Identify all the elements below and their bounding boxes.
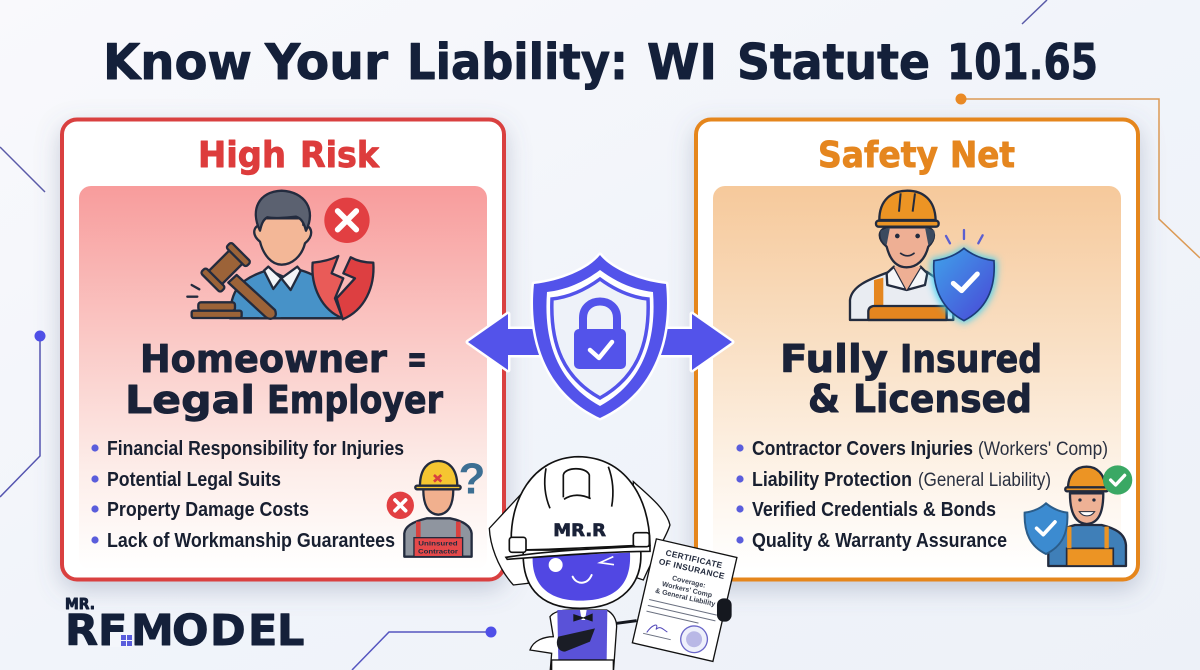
icon: uninsured contractor: Contractor [418, 548, 459, 555]
statement: homeowner equals legal employer: Homeowner [140, 337, 387, 381]
icon: uninsured contractor [387, 454, 485, 557]
heading: safety net: Net [950, 135, 1015, 176]
bullet list: protections: Liability Protection [752, 469, 912, 491]
certificate of insurance: Coverage: [671, 575, 706, 590]
certificate of insurance: CERTIFICATE [665, 547, 724, 570]
certificate of insurance [632, 539, 737, 661]
logo: Mr. Remodel: REMODEL [65, 606, 304, 656]
icon: happy contractor with shield and check [1025, 465, 1132, 566]
robot hand on certificate [717, 598, 732, 622]
bullet list: risks: Potential Legal Suits [107, 469, 281, 491]
panel: high risk [62, 120, 504, 580]
title: Know [103, 34, 252, 91]
bullet list: risks: Property Damage Costs [107, 499, 309, 521]
bullet list: protections [736, 438, 1108, 552]
certificate of insurance: Workers' Comp [661, 581, 713, 599]
robot head [523, 550, 641, 608]
title: Statute [737, 34, 930, 91]
heading: high risk [198, 135, 380, 176]
statement: homeowner equals legal employer [125, 337, 443, 422]
certificate of insurance: & General Liability [654, 588, 716, 608]
inner gradient: safety net [713, 186, 1121, 570]
icon: shield with padlock [533, 255, 667, 418]
robot visor face [533, 553, 630, 601]
icon: insured worker with glowing shield [850, 191, 997, 323]
statement: homeowner equals legal employer: Legal [125, 378, 255, 422]
logo: Mr. Remodel: MR. [65, 595, 95, 613]
arrow: double-headed [468, 314, 732, 370]
statement: fully insured and licensed [780, 337, 1042, 421]
mascot: Mr. R robot holding certificate [489, 457, 737, 670]
card frame: high risk [62, 120, 504, 580]
certificate of insurance: OF INSURANCE [658, 556, 726, 581]
robot body [530, 610, 637, 670]
bullet list: protections: (Workers' Comp) [978, 439, 1108, 460]
heading: high risk: High [198, 135, 286, 176]
bullet list: protections: (General Liability) [918, 470, 1051, 491]
title: Liability: [407, 34, 628, 91]
robot hard hat: MR.R [553, 521, 606, 540]
heading: safety net: Safety [818, 135, 938, 176]
title [103, 34, 1098, 91]
statement: fully insured and licensed: Fully [780, 337, 888, 381]
title: 101.65 [947, 34, 1098, 91]
bullet list: protections: Verified Credentials & Bonds [752, 499, 996, 521]
statement: fully insured and licensed: & [808, 377, 840, 421]
bullet list: risks [91, 438, 404, 552]
bullet list: risks: Lack of Workmanship Guarantees [107, 530, 395, 552]
icon: uninsured contractor: Uninsured [418, 541, 458, 548]
statement: homeowner equals legal employer: Employer [267, 378, 443, 422]
card frame: safety net [696, 120, 1138, 580]
icon: homeowner with gavel and broken shield [187, 191, 373, 319]
statement: homeowner equals legal employer: = [407, 337, 427, 381]
bullet list: protections: Contractor Covers Injuries [752, 438, 973, 460]
robot hard hat [506, 457, 650, 559]
title: Your [264, 34, 389, 91]
bullet list: risks: Financial Responsibility for Injuries [107, 438, 404, 460]
icon: uninsured contractor: ? [459, 454, 485, 503]
title: WI [647, 34, 717, 91]
center shield with arrows [468, 255, 732, 418]
panel: safety net [696, 120, 1138, 580]
heading: high risk: Risk [300, 135, 380, 176]
statement: fully insured and licensed: Licensed [853, 377, 1032, 421]
robot ear pads [489, 482, 670, 585]
statement: fully insured and licensed: Insured [900, 337, 1042, 381]
bullet list: protections: Quality & Warranty Assurance [752, 530, 1007, 552]
heading: safety net [818, 135, 1015, 176]
inner gradient: high risk [79, 186, 487, 570]
